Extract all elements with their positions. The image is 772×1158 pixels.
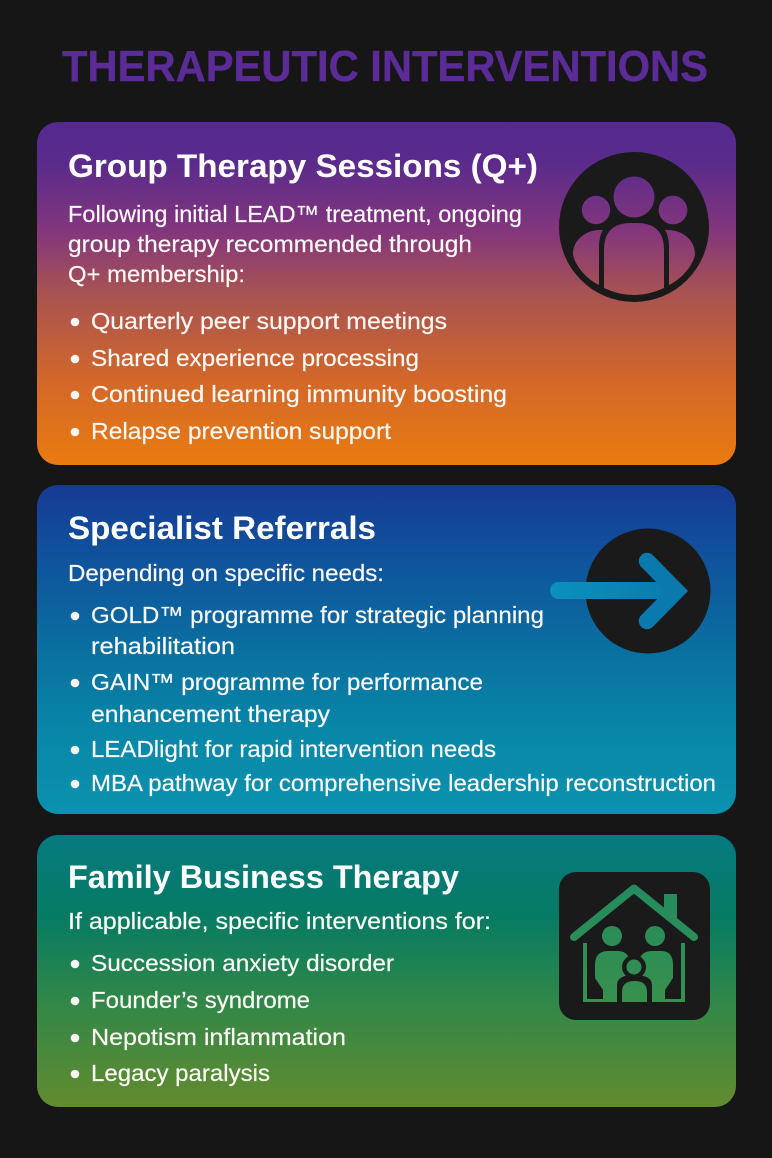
- bullet list: Relapse prevention support: [91, 418, 391, 444]
- bullet list: MBA pathway for comprehensive leadership reconstruction: [91, 770, 716, 796]
- bullet list: rehabilitation: [91, 633, 235, 659]
- icon: family in house: [559, 872, 710, 1020]
- intro text: [68, 201, 522, 287]
- bullet list: Succession anxiety disorder: [91, 950, 394, 976]
- bullet list: [71, 308, 507, 444]
- bullet list: [71, 950, 394, 1086]
- bullet list: GOLD™ programme for strategic planning: [91, 602, 544, 628]
- panel background: [37, 122, 736, 465]
- title: THERAPEUTIC INTERVENTIONS: [62, 42, 708, 91]
- bullet list: GAIN™ programme for performance: [91, 669, 483, 695]
- icon: arrow in circle: [558, 528, 710, 654]
- bullet list: [71, 602, 716, 796]
- intro text: Depending on specific needs:: [68, 560, 384, 586]
- bullet list: Nepotism inflammation: [91, 1024, 346, 1050]
- panel: family business therapy: [37, 835, 736, 1107]
- icon: group of people: [559, 152, 709, 302]
- bullet list: Shared experience processing: [91, 345, 419, 371]
- intro text: group therapy recommended through: [68, 231, 472, 257]
- panel background: [37, 485, 736, 814]
- bullet list: Founder’s syndrome: [91, 987, 310, 1013]
- heading: Specialist Referrals: [68, 510, 376, 546]
- panel background: [37, 835, 736, 1107]
- intro text: Q+ membership:: [68, 261, 245, 287]
- bullet list: Quarterly peer support meetings: [91, 308, 447, 334]
- bullet list: enhancement therapy: [91, 701, 330, 727]
- intro text: Following initial LEAD™ treatment, ongoing: [68, 201, 522, 227]
- heading: Group Therapy Sessions (Q+): [68, 148, 538, 184]
- bullet list: LEADlight for rapid intervention needs: [91, 736, 496, 762]
- bullet list: Continued learning immunity boosting: [91, 381, 507, 407]
- bullet list: Legacy paralysis: [91, 1060, 270, 1086]
- heading: Family Business Therapy: [68, 859, 459, 895]
- intro text: If applicable, specific interventions for:: [68, 908, 491, 934]
- panel: group therapy sessions: [37, 122, 736, 465]
- panel: specialist referrals: [37, 485, 736, 814]
